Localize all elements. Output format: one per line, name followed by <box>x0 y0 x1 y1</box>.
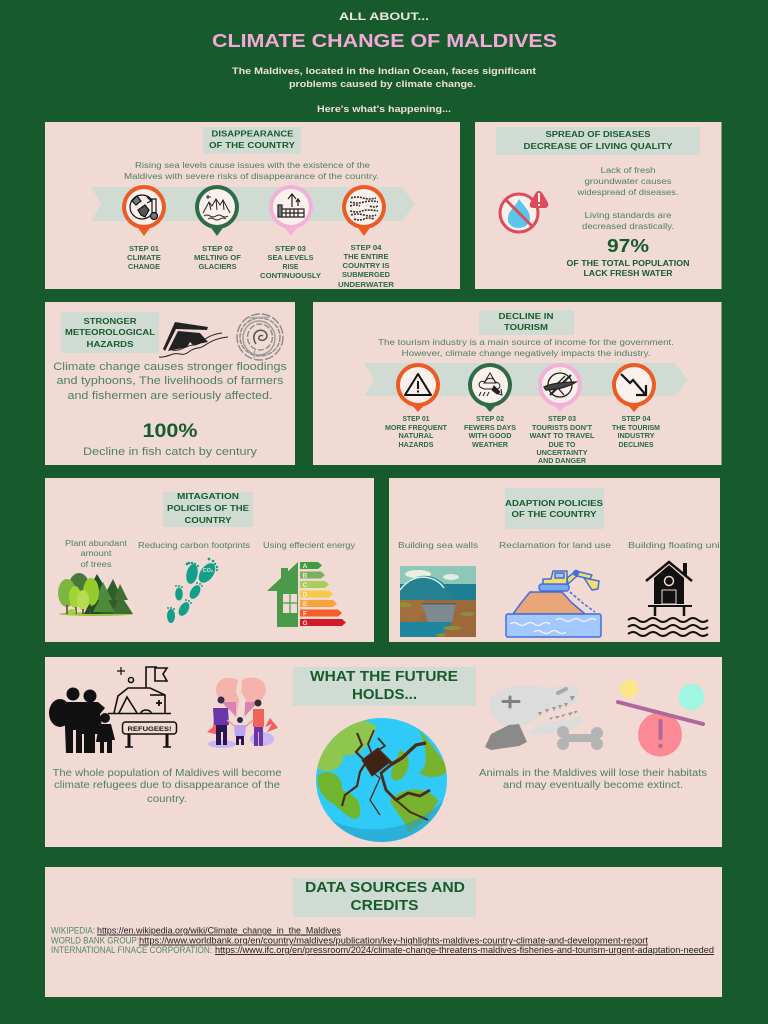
step 04 label: COUNTRY IS <box>342 263 390 270</box>
rating bars: A <box>303 563 308 570</box>
icon: carbon footprints <box>167 558 219 623</box>
step 03 label: STEP 03 <box>275 246 306 253</box>
icon: typhoon spiral <box>237 314 283 360</box>
source: ifc: https://www.ifc.org/en/pressroom/2024/climate-change-threatens-maldives-fisheries-and-tourism-urgent-adaptation-needed <box>215 945 714 956</box>
rating bars: F <box>303 610 307 618</box>
rating bars: C <box>303 582 308 589</box>
step 02 label: MELTING OF <box>194 255 242 262</box>
description: and typhoons, The livelihoods of farmers <box>56 375 284 387</box>
step 01 label <box>385 416 448 449</box>
step 02 label <box>194 246 242 271</box>
rating bars: D <box>303 592 308 598</box>
label: floating units: Building floating units <box>628 540 728 550</box>
step 04 label: INDUSTRY <box>618 433 655 440</box>
step 02 label: STEP 02 <box>202 246 233 253</box>
description: The tourism industry is a main source of income for the government. <box>378 337 674 347</box>
heading: spread of diseases: DECREASE OF LIVING QUALITY <box>524 141 673 151</box>
text: animals extinct: Animals in the Maldives will lose their habitats <box>479 768 707 779</box>
step 02 label <box>464 416 516 449</box>
heading: tourism: DECLINE IN <box>498 311 554 321</box>
heading: spread of diseases <box>496 127 700 155</box>
label: efficient energy: Using effecient energy <box>263 540 356 550</box>
description: Climate change causes stronger floodings <box>53 361 287 373</box>
description: However, climate change negatively impacts the industry. <box>402 348 650 358</box>
icon: extinct animal skull <box>490 685 582 735</box>
step 03 label: RISE <box>282 264 299 271</box>
panel: stronger meteorological hazards <box>45 302 295 465</box>
step 02 label: WEATHER <box>472 442 508 449</box>
heading: hazards <box>61 312 159 353</box>
pin: step 02 melting glaciers <box>195 185 239 236</box>
pin: step 04 submerged <box>342 185 386 236</box>
introduction text: problems caused by climate change. <box>289 79 476 90</box>
pin: step 04 downward trend <box>612 363 656 412</box>
source: wikipedia: WIKIPEDIA: <box>51 926 95 936</box>
description: Living standards are <box>584 210 672 220</box>
step 04 label: STEP 04 <box>350 245 382 252</box>
heading: spread of diseases: SPREAD OF DISEASES <box>546 129 651 139</box>
heading: tourism <box>479 310 574 335</box>
heading: mitigation: POLICIES OF THE <box>167 503 249 513</box>
heading: disappearance <box>203 127 301 154</box>
icon: refugee camp <box>108 667 176 747</box>
icon: flooded house <box>159 322 228 357</box>
step 03 label: DUE TO <box>548 442 576 449</box>
kicker: all about: ALL ABOUT... <box>339 11 429 23</box>
panel: disappearance of the country <box>45 122 460 289</box>
stat caption: OF THE TOTAL POPULATION <box>566 258 690 268</box>
text: climate refugees <box>52 768 282 805</box>
icon: bone <box>557 726 603 750</box>
step 01 label: CLIMATE <box>127 255 161 262</box>
header <box>212 11 557 115</box>
heading: disappearance: DISAPPEARANCE <box>212 128 294 138</box>
step 02 label: WITH GOOD <box>468 433 512 440</box>
heading: data sources: CREDITS <box>350 898 419 914</box>
label: sea walls: Building sea walls <box>398 540 478 550</box>
heading: future: WHAT THE FUTURE <box>310 669 458 685</box>
panel: decline in tourism <box>313 302 722 465</box>
step 02 label: STEP 02 <box>476 416 504 423</box>
source: wikipedia: https://en.wikipedia.org/wiki/Climate_change_in_the_Maldives <box>97 926 341 936</box>
stat caption: Decline in fish catch by century <box>83 446 258 458</box>
step 01 label: CHANGE <box>128 264 160 271</box>
icon: refugee family <box>49 688 115 753</box>
heading: data sources <box>293 878 476 917</box>
text: animals extinct: and may eventually become extinct. <box>503 780 683 791</box>
heading: mitigation <box>163 491 253 527</box>
description: Rising sea levels cause issues with the existence of the <box>135 160 370 170</box>
step 04 label <box>612 416 660 449</box>
pin: step 01 climate globe <box>122 185 166 236</box>
description <box>378 337 674 358</box>
stat caption: LACK FRESH WATER <box>584 268 673 278</box>
icon: forest <box>58 573 133 616</box>
panel: what the future holds <box>45 657 722 847</box>
label: plant trees <box>65 538 128 569</box>
arrow band <box>364 363 688 396</box>
step 03 label: STEP 03 <box>548 416 576 423</box>
step 03 label <box>530 416 595 465</box>
introduction text: The Maldives, located in the Indian Ocean, faces significant <box>232 66 537 77</box>
introduction text <box>232 66 537 115</box>
heading: adaption: OF THE COUNTRY <box>512 509 597 519</box>
panel: data sources and credits <box>45 867 722 997</box>
heading: data sources: DATA SOURCES AND <box>305 880 465 896</box>
step 02 label: GLACIERS <box>198 264 237 271</box>
step 01 label: HAZARDS <box>398 442 434 449</box>
step 04 label: UNDERWATER <box>338 282 394 289</box>
step 04 label: THE TOURISM <box>612 425 660 432</box>
description <box>124 160 379 181</box>
arrow band <box>91 187 415 221</box>
step 02 label: FEWERS DAYS <box>464 425 516 432</box>
text: animals extinct <box>479 768 707 791</box>
pin: step 03 sea level rise <box>269 185 313 236</box>
step 04 label: DECLINES <box>618 442 654 449</box>
illustration: cracked earth <box>315 717 449 845</box>
text: climate refugees: country. <box>147 794 187 805</box>
step 01 label: STEP 01 <box>402 416 430 423</box>
label: reclamation: Reclamation for land use <box>499 540 611 550</box>
heading: adaption <box>505 488 604 529</box>
step 04 label: SUBMERGED <box>342 272 390 279</box>
description: Maldives with severe risks of disappearance of the country. <box>124 171 379 181</box>
text: climate refugees: The whole population of Maldives will become <box>52 768 282 779</box>
step 03 label: WANT TO TRAVEL <box>530 433 595 440</box>
description: widespread of diseases. <box>576 187 678 197</box>
step 04 label: STEP 04 <box>622 416 651 423</box>
description <box>576 165 678 231</box>
heading: hazards: METEOROLOGICAL <box>65 327 155 337</box>
step 03 label: SEA LEVELS <box>268 255 314 262</box>
illustration: land reclamation <box>506 570 601 637</box>
heading: future <box>293 667 476 706</box>
icon: imbalance warning <box>618 680 704 756</box>
illustration: floating house <box>628 562 708 636</box>
description: and fishermen are seriously affected. <box>68 390 272 402</box>
panel: adaption policies <box>389 478 728 642</box>
pin: step 03 no travel <box>538 363 582 412</box>
stat: 97%: 97% <box>607 236 649 256</box>
heading: hazards: STRONGER <box>84 316 137 326</box>
stat: 100%: 100% <box>142 421 198 442</box>
description <box>53 361 287 402</box>
heading: mitigation: MITAGATION <box>177 491 239 501</box>
icon: no water warning <box>500 191 548 232</box>
heading: adaption: ADAPTION POLICIES <box>505 498 603 508</box>
icon: separated family <box>207 677 278 748</box>
step 01 label: STEP 01 <box>129 246 159 253</box>
step 03 label: AND DANGER <box>538 458 586 465</box>
step 01 label <box>127 246 161 271</box>
stat caption <box>566 258 690 278</box>
label: plant trees: amount <box>80 548 112 558</box>
rating bars <box>300 562 346 627</box>
rating bars: G <box>302 620 308 627</box>
panel: spread of diseases <box>475 122 722 289</box>
illustration: sea wall <box>399 566 476 637</box>
step 01 label: MORE FREQUENT <box>385 425 448 432</box>
step 03 label: CONTINUOUSLY <box>260 273 321 280</box>
title: CLIMATE CHANGE OF MALDIVES <box>212 31 557 51</box>
source: world bank: https://www.worldbank.org/en/country/maldives/publication/key-highlights-maldives-country-climate-and-development-report <box>139 936 648 946</box>
step 04 label <box>338 245 394 289</box>
heading: tourism: TOURISM <box>504 322 548 332</box>
water ripples <box>510 618 596 634</box>
step 01 label: NATURAL <box>398 433 434 440</box>
description: groundwater causes <box>584 176 672 186</box>
label: carbon footprints: Reducing carbon footprints <box>138 540 250 550</box>
source: world bank: WORLD BANK GROUP: <box>51 936 139 946</box>
rating bars: E <box>303 601 308 608</box>
pin: step 02 storm <box>468 363 512 412</box>
heading: future: HOLDS... <box>352 687 417 703</box>
heading: hazards: HAZARDS <box>86 339 134 349</box>
description: decreased drastically. <box>582 221 674 231</box>
icon: energy rating house <box>267 562 346 627</box>
step 03 label: TOURISTS DON'T <box>532 425 593 432</box>
introduction text: Here's what's happening... <box>317 104 451 115</box>
step 03 label <box>260 246 321 280</box>
description: Lack of fresh <box>600 165 656 175</box>
pin: step 01 warning <box>396 363 440 412</box>
heading: disappearance: OF THE COUNTRY <box>209 140 295 150</box>
rating bars: B <box>303 572 308 580</box>
label: plant trees: of trees <box>80 559 112 569</box>
heading: mitigation: COUNTRY <box>184 515 232 525</box>
icon: rock <box>485 724 527 750</box>
source: ifc: INTERNATIONAL FINACE CORPORATION: <box>51 945 212 956</box>
label: plant trees: Plant abundant <box>65 538 128 548</box>
refugees sign: REFUGEES! <box>128 726 172 733</box>
text: climate refugees: climate refugees due to disappearance of the <box>54 780 280 791</box>
icon: carbon footprints: CO₂ <box>203 568 214 574</box>
step 04 label: THE ENTIRE <box>344 254 389 261</box>
panel: mitigation policies <box>45 478 374 642</box>
step 03 label: UNCERTAINTY <box>536 450 588 457</box>
